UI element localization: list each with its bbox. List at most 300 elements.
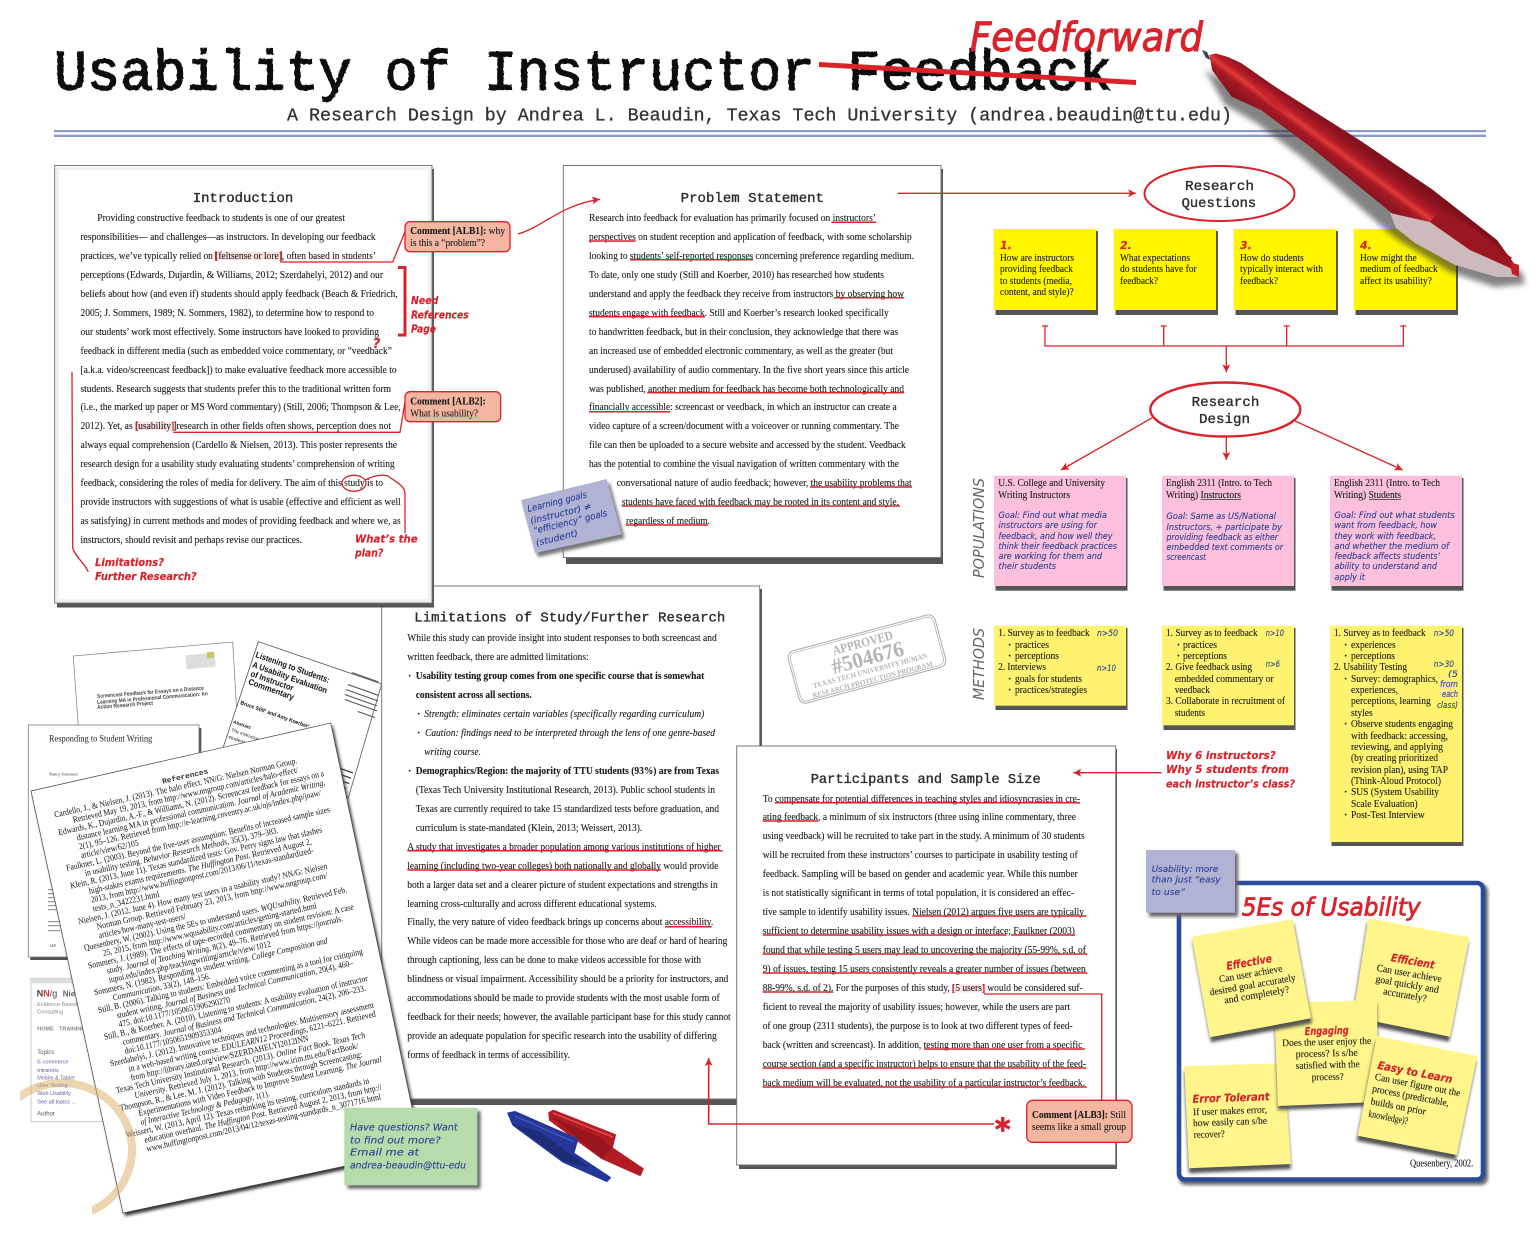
panel: question 1: 1. [1000,239,1012,252]
panel: methods 3: class) [1437,701,1458,711]
panel: methods 2: practices [1183,640,1217,651]
page: references: University. Retrieved July 1, 2013, from http://www.irim.ttu.edu/FactBook/ [133,1040,360,1100]
panel: methods 3: revision plan), using TAP [1351,765,1448,776]
panel: question 1: to students (media, [1000,276,1072,287]
page: screencast article: Screencast Feedback for Essays on a Distance [97,686,204,700]
page: references: Thompson, R., & Lee, M. J. (2012). Talking with Students through Screencasting: [119,1049,363,1113]
panel: question 3: 3. [1240,239,1252,252]
body text: back medium will be evaluated, not the usability of a particular instructor’s feedback. [763,1078,1085,1089]
body text: While this study can provide insight into student responses to both screencast and [407,633,717,644]
icon: red pen [1202,50,1525,287]
stamp: approved: APPROVED [831,627,894,658]
body text: an increased use of embedded electronic commentary, as well as the greater (but [589,346,893,357]
callout: comment ALB1: Comment [ALB1]: why [410,226,505,237]
journal notes block [345,672,378,718]
page: web article screenshot: Niel [63,990,77,999]
note: learning goals: “efficiency” goals [532,509,609,537]
panel: methods 3: (5 [1448,670,1458,680]
body text: 88-99%, s.d. of 2). For the purposes of this study, [5 users] would be considered suf- [763,983,1083,994]
panel: population 3 [1330,476,1464,591]
note: learning goals: (student) [535,529,579,549]
page: web article screenshot: User Testing [37,1083,68,1089]
panel: population 3: Writing) Students [1334,490,1401,501]
panel: population 1: Goal: Find out what media [998,511,1107,521]
sticky: error tolerant: Error Tolerant [1192,1090,1270,1106]
panel: methods 3: experiences [1351,640,1396,651]
panel: question 3: typically interact with [1240,264,1323,275]
body text: · [417,709,420,720]
page: listening to students article: of Instructor [249,668,296,693]
sticky: engaging: process? Is s/he [1296,1048,1358,1060]
body text: consistent across all sections. [416,690,532,701]
body text: students engage with feedback. Still and Koerber’s research looked specifically [589,308,889,319]
body text: Usability testing group comes from one specific course that is somewhat [416,671,705,682]
panel: question 3: How do students [1240,253,1304,264]
body text: written feedback, there are admitted limitations: [407,652,589,663]
panel: population 3: English 2311 (Intro. to Tech [1334,478,1440,489]
panel: population 2: Writing) Instructors [1166,490,1241,501]
panel: question 4: How might the [1360,253,1417,264]
oval: research questions [1144,166,1294,221]
panel: methods 3: · [1344,640,1347,651]
panel: population 1: are working for them and [998,552,1102,562]
panel: question 1: providing feedback [1000,264,1073,275]
panel: methods 2: · [1177,640,1180,651]
icon: red pen cap [549,1111,643,1175]
panel: methods 3: Scale Evaluation) [1351,799,1418,810]
lower body lines [338,767,353,789]
panel: population 2: Goal: Same as US/National [1166,512,1276,522]
panel: population 2: providing feedback as either [1166,533,1279,543]
page: screencast article [73,642,239,765]
arrow: asterisk to limitations [709,1058,1011,1148]
callout: comment ALB3 [1027,1100,1132,1142]
arrow: asterisk to limitations: * [995,1113,1011,1148]
highlight [953,984,984,992]
page: references: education overhaul. The Huffington Post. Retrieved August 2, 2013, from http:// [143,1082,383,1145]
body text: · [408,766,411,777]
panel: methods 3: styles [1351,708,1373,719]
panel: population 3: and whether the medium of [1334,542,1451,552]
panel: methods 1: n>10 [1097,664,1116,674]
panel: methods 3: (by creating prioritized [1351,753,1438,764]
sticky: easy to learn: knowledge)? [1368,1109,1409,1127]
page: responding to student writing: Nancy Sommers [49,772,78,776]
note: why 6 instructors: each instructor’s class? [1166,778,1296,791]
body text: 9) of issues, testing 15 users consistently reveals a greater number of issues (between [763,964,1086,975]
page: references: Weissert, W. (2013, April 12). Texas rethinking its testing, curriculum standards in [125,1075,370,1140]
body text: found that while testing 5 users may lead to uncovering the majority (55-99%, s.d. of [763,945,1087,956]
page: web article screenshot [31,978,115,1122]
body text: perceptions (Edwards, Dujardin, & Williams, 2012; Szerdahelyi, 2012) and our [80,270,384,281]
note: need references page: Need [411,294,438,307]
panel: population 2 [1162,476,1296,591]
icon: blue pen cap [508,1112,610,1181]
sticky: easy to learn: Easy to Learn [1377,1059,1454,1086]
body text: through captioning, less can be done to make videos accessible for those with [407,955,701,966]
citation: Quesenbery, 2002. [1410,1158,1473,1170]
sticky: efficient: accurately? [1382,986,1428,1005]
sticky: engaging: Does the user enjoy the [1282,1036,1372,1049]
callout: comment ALB3: seems like a small group [1032,1122,1126,1133]
body text: Texas are currently required to take 15 standardized tests before graduation, and [416,804,719,815]
page: references: Still, B. (2006). Talking to students: Embedded voice commenting as a tool for critiquing [97,946,364,1015]
arrow: comment to problem statement [518,199,600,234]
callout: comment ALB2 [405,392,501,422]
callout: comment ALB3: Comment [ALB3]: Still [1032,1110,1126,1121]
panel: methods 3: n>30 [1434,660,1454,670]
body text: research design for a usability study evaluating students’ comprehension of writing [80,459,395,470]
panel: introduction: plan? [354,547,384,560]
panel: methods 1: 2. Interviews [998,662,1046,673]
panel: methods 2: students [1175,708,1205,719]
panel: methods 1: practices [1015,640,1049,651]
page: web article screenshot: HOME [37,1027,54,1033]
heading: Participants and Sample Size [811,772,1041,788]
heading: Problem Statement [681,191,824,207]
body text: beliefs about how (and even if) students should apply feedback (Beach & Friedrich, [80,289,398,300]
body text: accommodations should be made to provide students with the most usable form of [407,993,720,1004]
panel: methods 2: perceptions [1183,651,1227,662]
page: web article screenshot: See all topics ... [37,1099,77,1105]
label: populations: POPULATIONS [970,478,988,578]
handwritten replacement word: Feedforward [970,15,1204,61]
panel: question 4: medium of feedback [1360,264,1438,275]
body text [589,213,914,527]
panel: methods 3: Observe students engaging [1351,719,1453,730]
page: web article screenshot: Intranets [37,1068,59,1074]
coffee ring stain [20,1079,136,1214]
note: usability more than easy to use: Usability: more [1152,865,1219,875]
arrow: problem statement to research questions [898,192,1136,194]
page: references: Szerdahelyi, J. (2012). Innovative techniques and technologies: Multisensory assessment [109,1000,375,1068]
panel: methods 3: experiences, [1351,685,1398,696]
sticky: engaging: process? [1312,1072,1344,1083]
body text: to handwritten feedback, but in their conclusion, they acknowledge that there was [589,327,898,338]
stamp: approved: TEXAS TECH UNIVERSITY HUMAN [812,651,929,690]
title [54,15,1204,108]
page: references: Faulkner, L. (2003). Beyond the five-user assumption: Benefits of increased sample sizes [65,804,331,873]
sticky: engaging [1274,1000,1378,1110]
panel: population 2: screencast [1166,553,1206,563]
sticky: efficient [1352,918,1469,1042]
body text: Caution: findings need to be interpreted through the lens of one genre-based [425,728,716,739]
panel: question 3: feedback? [1240,276,1279,287]
page: references: Quesenbery, W. (2002). Using the 5Es to understand users. WQUsability. Retrieved Feb. [83,884,348,953]
page: references: Edwards, K., Dujardin, A.-F., & Williams, N. (2012). Screencast feedback for essays on a [57,768,325,837]
panel: population 3: they work with feedback, [1334,532,1436,542]
body text [80,213,401,546]
note: have questions: Email me at [350,1147,420,1158]
panel: 5Es of usability [1179,883,1488,1185]
note: why 6 instructors: Why 5 students from [1166,763,1289,776]
note: learning goals: (instructor) ≠ [529,502,593,527]
sticky: error tolerant [1184,1063,1291,1173]
body text: sufficient to determine usability issues with a design or interface; Faulkner (2003) [763,926,1075,937]
panel: participants and sample size [737,746,1117,1169]
body text: using veedback) will be recruited to take part in the study. A minimum of 30 students [763,831,1085,842]
body text: our students’ work most effectively. Some instructors have looked to providing [80,327,379,338]
panel: population 1: their students [998,562,1056,572]
logo [186,653,216,669]
title: Usability of Instructor Feedback [54,44,1112,108]
panel: question 4: affect its usability? [1360,276,1433,287]
body text: responsibilities— and challenges—as instructors. In developing our feedback [80,232,376,243]
panel: limitations of study [382,586,762,1105]
panel: population 3: ability to understand and [1334,562,1437,572]
sticky: engaging: Engaging [1305,1024,1349,1038]
page: listening to students article: Bruce Still¹ and Amy Koerber¹ [239,699,311,730]
panel: methods 1: · [1008,674,1011,685]
body text: While videos can be made more accessible for those who are deaf or hard of hearing [407,936,727,947]
body text: of one group (2311 students), the purpose is to look at two different types of feed- [763,1021,1073,1032]
page: references: distance learning MA in professional communication. Journal of Academic Writing, [76,777,326,842]
body text: looking to students’ self-reported responses concerning preference regarding medium. [589,251,914,262]
panel: population 3: want from feedback, how [1334,521,1438,531]
connector: questions to research design [1042,326,1406,372]
page: web article screenshot: Mobile & Tablet [37,1076,75,1082]
page: listening to students article [223,642,382,798]
callout: comment ALB1 [405,222,510,252]
body text: (i.e., the marked up paper or MS Word commentary) (Still, 2006; Thompson & Lee, [80,402,401,413]
body text: file can then be uploaded to a secure website and accessed by the student. Veedback [589,440,906,451]
page: web article screenshot: Consulting [37,1010,63,1016]
panel: methods 1: practices/strategies [1015,685,1087,696]
page: responding to student writing [28,725,201,960]
panel: question 4 [1354,229,1458,315]
panel: methods 2: embedded commentary or [1175,674,1274,685]
callout: comment ALB2: What is usability? [410,408,479,419]
body text: will be recruited from these instructors’ courses to participate in usability testing of [763,850,1078,861]
body text: course section (and a specific instructor) helps to ensure that the usability of the feed- [763,1059,1086,1070]
body text: Demographics/Region: the majority of TTU students (93%) are from Texas [416,766,719,777]
sticky: effective: desired goal accurately [1209,973,1297,998]
page: references: Norman Group. Retrieved February 23, 2013, from http://www.nngroup.com/ [96,870,329,931]
panel: methods 2: 2. Give feedback using [1166,662,1252,673]
sticky: effective: and completely? [1223,984,1291,1007]
panel: methods 3: reviewing, and applying [1351,742,1443,753]
references heading: References [162,768,210,787]
page: references: doi:10.1177/1050651909353304 [124,1024,223,1056]
panel: population 3: feedback affects students’ [1334,552,1440,562]
panel: population 1: think their feedback practices [998,542,1117,552]
page: references: in a web-based writing course. EDULEARN12 Proceedings, 6221–6221. Retrieved [127,1009,377,1074]
panel: methods 3: Post-Test Interview [1351,810,1425,821]
sticky: error tolerant: If user makes error, [1193,1105,1267,1118]
page: references: student writing. Journal of Business and Technical Communication, 20(4), 460– [116,958,354,1020]
panel: methods 2: 3. Collaborate in recruitment of [1166,696,1286,707]
page: references: in usability testing. Behavior Research Methods, 35(3), 379–383. [84,825,279,878]
panel: methods 3: with feedback: accessing, [1351,731,1448,742]
body text: To date, only one study (Still and Koerber, 2010) has researched how students [589,270,884,281]
body text: ficient to reveal the majority of usability issues; however, while the users are part [763,1002,1070,1013]
panel: methods 3: · [1344,674,1347,685]
note: why 6 instructors: Why 6 instructors? [1166,749,1276,762]
sticky: efficient: goal quickly and [1375,974,1440,996]
panel: introduction: ? [373,337,381,352]
panel: methods 3: (Think-Aloud Protocol) [1351,776,1441,787]
panel: population 1 [994,476,1128,591]
sticky: effective: Effective [1225,952,1273,973]
panel: methods 3: · [1344,787,1347,798]
sticky: easy to learn: process (predictable, [1371,1084,1450,1109]
page: references: 2(1), 95–126. Retrieved from http://e-learning.coventry.ac.uk/ojs/index.php/joaw/ [78,787,322,851]
sticky: error tolerant: how easily can s/he [1193,1116,1268,1129]
body text: A study that investigates a broader population among various institutions of higher [407,842,721,853]
body text: provide an adequate population for specific research into the usability of differing [407,1031,717,1042]
sticky: engaging: satisfied with the [1296,1059,1360,1072]
stamp: approved [787,613,947,705]
panel: introduction: Further Research? [95,570,197,583]
body text: always equal comprehension (Cardello & Nielsen, 2013). This poster represents the [80,440,398,451]
body text: was published, another medium for feedback has become both technologically and [589,384,904,395]
page: references: study. Journal of Teaching Writing, 8(2), 49–76. Retrieved from https://journals. [106,913,344,976]
sticky: effective: Can user achieve [1218,963,1284,985]
body text: video capture of a screen/document with a voiceover or running commentary. The [589,421,900,432]
body text: 2005; J. Sommers, 1989; N. Sommers, 1982), to determine how to respond to [80,308,374,319]
panel: methods 1: · [1008,651,1011,662]
body text: regardless of medium. [626,516,710,527]
oval: research questions: Research [1185,179,1254,195]
panel: methods 3: SUS (System Usability [1351,787,1439,798]
page: references: high-stakes exams requirements. The Huffington Post. Retrieved August 2, [88,836,312,896]
panel: methods 3: 2. Usability Testing [1334,662,1407,673]
body text: writing course. [424,747,481,758]
panel: methods 2 [1162,626,1296,730]
panel: methods 3: 1. Survey as to feedback [1334,628,1426,639]
body text: practices, we’ve typically relied on [feltsense or lore], often based in students’ [80,251,376,262]
body text: [a.k.a. video/screencast feedback]) to make evaluative feedback more accessible to [80,365,397,376]
page: listening to students article: A Usability Evaluation [251,659,329,695]
sticky: effective [1192,919,1312,1042]
page: listening to students article: Abstract [233,719,252,730]
panel: question 2: feedback? [1120,276,1159,287]
panel: methods 1: perceptions [1015,651,1059,662]
body text: feedback in different media (such as embedded voice commentary, or “veedback” [80,346,392,357]
page: web article screenshot: NN/g [37,989,57,999]
page: references: commentary. Journal of Business and Technical Communication, 24(2), 206–233. [122,983,367,1047]
page: references: Still, B., & Koerber, A. (2010). Listening to students: A usability evaluation of instructor [103,973,369,1042]
panel: population 3: Goal: Find out what students [1334,511,1455,521]
page: references: tests_n_3422231.html [92,889,161,913]
page: references: Cardello, J., & Nielsen, J. (2013). The halo effect. NN/G: Nielsen Norman Group. [53,756,298,819]
body text: Providing constructive feedback to students is one of our greatest [97,213,345,224]
panel: question 2 [1114,229,1218,315]
body text: tive sample to identify usability issues. Nielsen (2012) argues five users are typically [763,907,1084,918]
page: listening to students article: Listening to Students: [254,649,331,685]
page: references: 2013, from http://www.huffingtonpost.com/2013/06/11/texas-standardized- [90,845,314,905]
page: web article screenshot: Topics [37,1050,54,1056]
panel: introduction: References [411,308,469,321]
body text: curriculum is state-mandated (Klein, 2013; Weissert, 2013). [416,823,642,834]
panel: question 1 [994,229,1098,315]
page: references: Nielsen, J. (2012, June 4). How many test users in a usability study? NN/G: Nielsen [77,861,329,926]
panel: methods 2: 1. Survey as to feedback [1166,628,1258,639]
page: web article screenshot: TRAINING [59,1027,86,1033]
panel: methods 1 [994,626,1128,710]
panel: methods 1: · [1008,685,1011,696]
body text: underused) availability of audio commentary. In the five short years since this article [589,365,910,376]
body text [763,794,1087,1089]
note: have questions: andrea-beaudin@ttu-edu [350,1160,466,1171]
page: web article screenshot: Author [37,1111,55,1117]
heading: Introduction [193,191,293,207]
sticky: efficient: Can user achieve [1376,963,1443,985]
callout: comment ALB2: Comment [ALB2]: [410,396,486,407]
page: listening to students article: student writing during [228,734,277,756]
oval: research design [1150,382,1300,436]
note: what's the plan: What’s the [355,533,418,546]
sticky: easy to learn [1357,1036,1477,1160]
body text: feedback, considering the roles of media for delivery. The aim of this study is to [80,478,383,489]
note: learning goals [521,479,625,557]
body text: Research into feedback for evaluation has primarily focused on instructors’ [589,213,876,224]
panel: methods 1: goals for students [1015,674,1082,685]
panel: methods 3: n>50 [1434,629,1454,639]
panel: population 2: embedded text comments or [1166,543,1284,553]
note: have questions: Have questions? Want [350,1123,459,1134]
panel: methods 3: · [1344,810,1347,821]
heading: 5Es of Usability [1242,893,1422,922]
note: learning goals: Learning goals [527,490,588,515]
page: references [31,723,423,1216]
heading: Limitations of Study/Further Research [414,610,725,626]
page: references: of Interactive Technology & Pedagogy, 1(1). [139,1088,270,1127]
panel: question 2: 2. [1120,239,1132,252]
panel: population 2: Instructors, + participate by [1166,523,1283,533]
panel: methods 2: veedback [1175,685,1210,696]
body text: financially accessible: screencast or veedback, in which an instructor can create a [589,402,897,413]
page: references: Klein, R. (2013, June 11). Texas standardized tests: Gov. Perry signs law that slashes [69,824,324,891]
page: references: Experimentations with Video Feedback to Improve Student Learning. The Journal [137,1054,383,1118]
body text: forms of feedback in terms of accessibility. [407,1050,570,1061]
page: references: article/view/62/105 [80,837,140,860]
panel: methods 2: · [1177,651,1180,662]
panel: introduction: Page [411,323,436,336]
oval: research questions: Questions [1182,196,1256,212]
body text: learning cross-culturally and across different educational systems. [407,899,657,910]
body text: is not statistically significant in terms of total population, it is considered an effec- [763,888,1074,899]
page: references: Sommers, N. (1982). Responding to student writing. College Composition and [93,935,329,997]
panel: question 3 [1234,229,1338,315]
page: screencast article: Learning MA in Professional Communication: An [97,691,209,706]
body text: feedback for their needs; however, the available participant base for this study cannot [407,1012,731,1023]
sticky: easy to learn: Can user figure out the [1374,1072,1462,1099]
page: screencast article: Action Research Project [97,701,153,711]
page: web article screenshot: E-commerce [37,1060,68,1066]
body text: · [408,671,411,682]
sticky: efficient: Efficient [1390,951,1436,972]
body text: Finally, the very nature of video feedback brings up concerns about accessibility. [407,917,713,928]
body text: learning (including two-year colleges) both nationally and globally would provide [407,861,719,872]
page: references: www.huffingtonpost.com/2013/04/12/texas-testing-standards_n_3071716.html [145,1091,382,1154]
page: references: 475. doi:10.1177/1050651906290270 [118,994,231,1029]
page: references: iupui.edu/index.php/teachingwriting/article/view/1012 [108,939,272,985]
panel: question 1: How are instructors [1000,253,1074,264]
body text: has the potential to combine the visual navigation of written commentary with the [589,459,900,470]
page: references: from http://library.iated.org/view/SZERDAHELYI2012INN [129,1033,310,1082]
subtitle: A Research Design by Andrea L. Beaudin, Texas Tech University (andrea.beaudin@ttu.edu) [287,106,1232,126]
panel: methods 3: · [1344,719,1347,730]
page: references: Texas Tech University Institutional Research. (2013). Online Fact Book. Texas Tech [115,1030,366,1095]
panel: methods 3: Survey: demographics, [1351,674,1438,685]
panel: population 1: Writing Instructors [998,490,1070,501]
page: web article screenshot: Evidence-Based [37,1002,77,1008]
page: references: 25, 2015, from http://www.wqusability.com/articles/getting-started.html [102,900,318,958]
panel: population 2: English 2311 (Intro. to Tech [1166,478,1272,489]
body text: understand and apply the feedback they receive from instructors by observing how [589,289,905,300]
body text: · [417,728,420,739]
